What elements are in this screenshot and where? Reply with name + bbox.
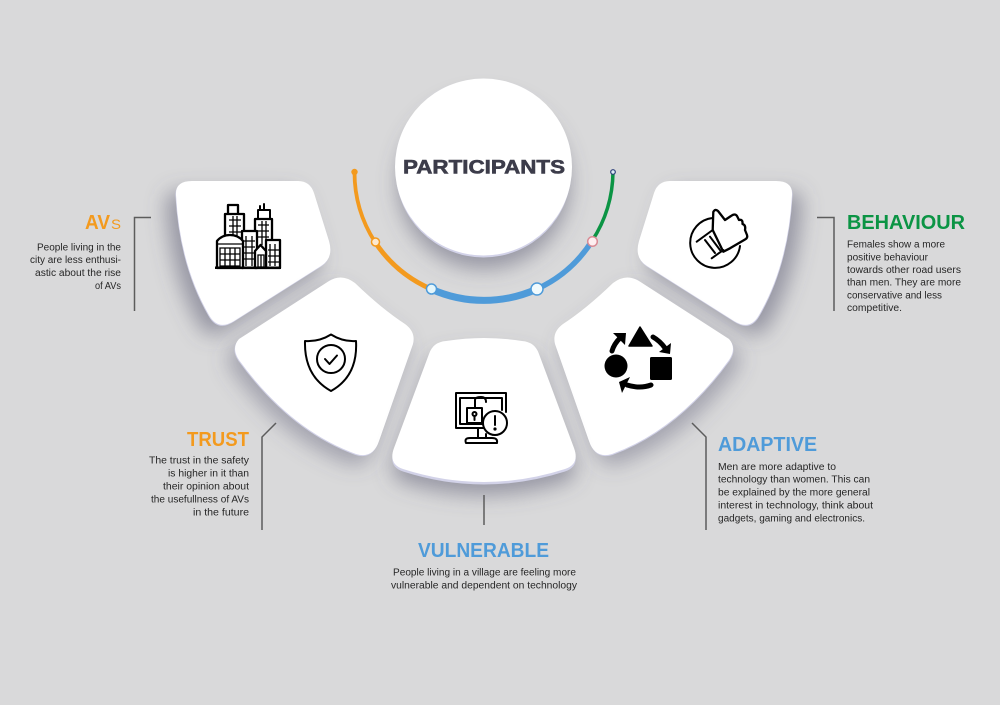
text block: Adaptive: interest in technology, think about: [718, 500, 873, 512]
leader line: AVs: [134, 218, 151, 311]
text block: Adaptive: Men are more adaptive to: [718, 462, 836, 473]
leader line: Vulnerable: [483, 495, 485, 525]
text block: Adaptive: [718, 434, 873, 524]
icon: shapes cycle: [604, 327, 672, 393]
text block: Trust: TRUST: [187, 429, 249, 451]
text block: Trust: the usefullness of AVs: [151, 494, 249, 506]
text block: Adaptive: gadgets, gaming and electronics.: [718, 514, 865, 524]
panel: Behaviour: [638, 181, 802, 335]
text block: AVs: S: [111, 216, 121, 232]
text block: Trust: in the future: [193, 508, 249, 518]
text block: Behaviour: BEHAVIOUR: [847, 212, 966, 234]
text block: Trust: [149, 429, 249, 518]
text block: Adaptive: be explained by the more general: [718, 488, 870, 498]
text block: Behaviour: conservative and less: [847, 290, 942, 302]
text block: Trust: The trust in the safety: [149, 456, 249, 466]
text block: Vulnerable: VULNERABLE: [418, 540, 549, 562]
icon: monitor with lock and alert: [456, 393, 507, 443]
icon: city buildings: [215, 204, 281, 269]
text block: AVs: astic about the rise: [35, 268, 121, 279]
leader line: Behaviour: [817, 218, 834, 311]
text block: Behaviour: competitive.: [847, 303, 902, 314]
heading: Participants: PARTICIPANTS: [403, 158, 565, 178]
text block: AVs: [30, 212, 121, 292]
leader line: Trust: [262, 423, 276, 530]
icon: thumbs up: [690, 210, 747, 268]
panel: Trust: [228, 277, 414, 465]
panel: AVs: [166, 181, 330, 335]
text block: Behaviour: than men. They are more: [847, 278, 961, 288]
text block: Vulnerable: [391, 540, 577, 592]
leader line: Adaptive: [692, 423, 706, 530]
icon: shield with check: [305, 334, 356, 391]
text block: AVs: People living in the: [37, 242, 121, 254]
arc timeline: [351, 169, 615, 300]
center circle: Participants: [395, 78, 572, 269]
panel: Vulnerable: [392, 338, 576, 495]
text block: AVs: city are less enthusi-: [30, 255, 121, 266]
text block: Vulnerable: People living in a village are feeling more: [393, 568, 576, 578]
text block: Trust: their opinion about: [163, 482, 249, 492]
text block: AVs: of AVs: [95, 281, 121, 292]
text block: Behaviour: positive behaviour: [847, 252, 929, 264]
text block: Vulnerable: vulnerable and dependent on technology: [391, 580, 577, 592]
text block: AVs: AV: [85, 212, 111, 234]
text block: Behaviour: towards other road users: [847, 265, 961, 276]
text block: Trust: is higher in it than: [168, 468, 249, 480]
text block: Behaviour: Females show a more: [847, 240, 945, 250]
text block: Behaviour: [847, 212, 966, 314]
panel: Adaptive: [554, 277, 740, 465]
arc nodes: [351, 169, 615, 295]
text block: Adaptive: ADAPTIVE: [718, 434, 817, 456]
text block: Adaptive: technology than women. This can: [718, 474, 870, 486]
